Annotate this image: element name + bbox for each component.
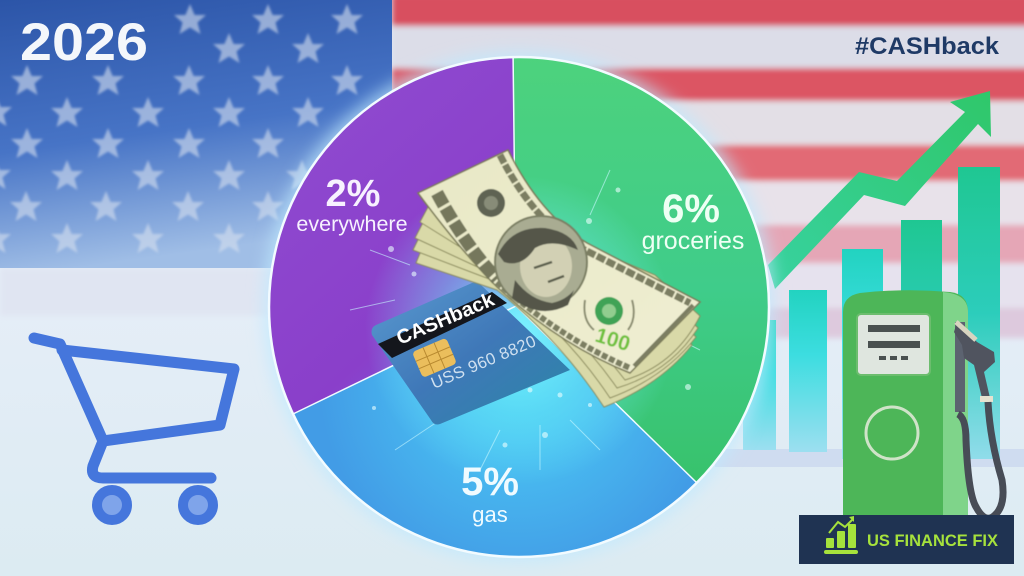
label: 2% everywhere: everywhere	[296, 212, 408, 236]
sparks	[350, 170, 700, 470]
pump body	[843, 290, 968, 520]
hashtag: #CASHback	[855, 33, 1000, 60]
pump screen	[857, 314, 930, 375]
top bill	[418, 150, 700, 373]
label: 6% groceries	[642, 187, 744, 255]
year label: 2026	[20, 13, 148, 72]
label: 5% gas: 5%	[461, 460, 519, 504]
pump dial	[866, 407, 918, 459]
money stack	[413, 150, 700, 407]
pie outline	[269, 57, 769, 557]
logo icon	[824, 516, 858, 554]
slice seams	[293, 50, 697, 483]
green 100: 100	[593, 324, 633, 356]
bars	[743, 167, 1000, 460]
canton with stars	[0, 0, 392, 268]
slice: 2% everywhere	[270, 58, 515, 413]
credit card	[372, 282, 570, 424]
gas pump	[843, 290, 1003, 520]
slices	[270, 58, 768, 556]
label: 5% gas: gas	[472, 502, 508, 527]
chip	[412, 338, 457, 378]
card number: USS 960 8820	[429, 332, 539, 393]
flag stripes	[0, 0, 1024, 338]
magnetic strip	[378, 292, 507, 358]
centre glow	[372, 186, 656, 460]
pie chart	[268, 56, 770, 558]
slice: 6% groceries	[514, 58, 768, 482]
label: 6% groceries: 6%	[662, 187, 720, 231]
shopping cart icon	[34, 338, 234, 520]
slice: 5% gas	[294, 307, 696, 556]
label: 5% gas	[461, 460, 519, 527]
label: 6% groceries: groceries	[642, 227, 744, 255]
label: 2% everywhere: 2%	[326, 173, 380, 215]
card brand: CASHback	[393, 288, 498, 350]
arrow: rising trend	[768, 91, 991, 289]
lower bills	[413, 185, 700, 407]
brand name: US FINANCE FIX	[867, 531, 999, 550]
green seal	[584, 297, 634, 330]
pie glow	[263, 51, 775, 563]
label: 2% everywhere	[296, 173, 408, 236]
portrait	[495, 216, 587, 311]
nozzle	[954, 322, 995, 412]
hose	[958, 402, 1003, 518]
chart base	[715, 449, 1024, 467]
bar chart	[715, 167, 1024, 467]
bill engraving	[437, 155, 693, 368]
brand badge	[799, 515, 1014, 564]
